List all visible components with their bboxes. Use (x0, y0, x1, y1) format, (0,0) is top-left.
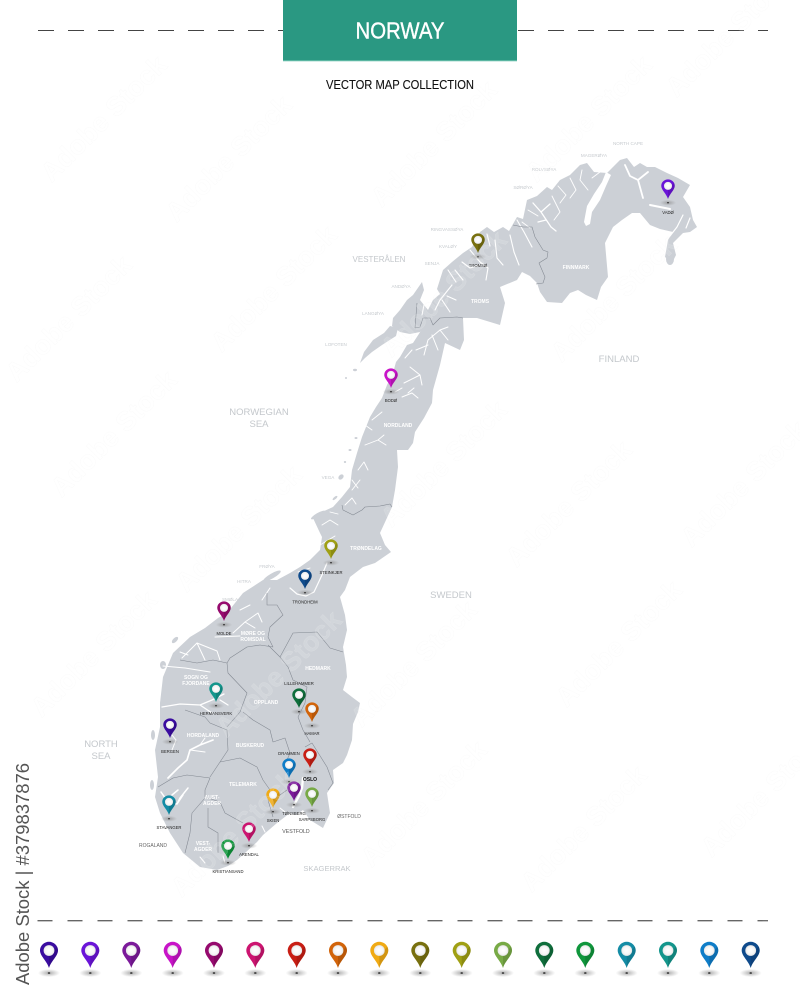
pin: Skien (265, 788, 281, 823)
pin: Steinkjer (319, 539, 343, 575)
pin: Tønsberg: TØNSBERG (282, 811, 306, 816)
pin: Bodø: BODØ (385, 398, 398, 403)
surrounding labels: HITRA (237, 579, 252, 584)
stock watermarks: Adobe Stock (375, 224, 513, 363)
surrounding labels: KVALØY (439, 244, 457, 249)
surrounding labels: SEA (249, 419, 269, 430)
pin: Tromsø (469, 233, 488, 268)
surrounding labels: SØRØYA (513, 185, 534, 190)
fjords (161, 165, 690, 863)
surrounding labels: SMØLA (222, 597, 239, 602)
surrounding labels: SENJA (425, 261, 440, 266)
pin: Bergen: BERGEN (161, 749, 179, 754)
subtitle: VECTOR MAP COLLECTION (326, 78, 474, 92)
surrounding labels: LANGØYA (362, 311, 385, 316)
surrounding labels: NORTH (84, 739, 118, 750)
pin: Bodø (383, 368, 399, 403)
county labels: BUSKERUD (236, 743, 265, 749)
county labels: FJORDANE (182, 681, 210, 687)
pin: Lillehammer (284, 681, 314, 715)
county labels: HORDALAND (187, 733, 219, 739)
county labels: TROMS (471, 299, 490, 305)
county labels: AUST- (204, 795, 220, 801)
county labels: AGDER (203, 801, 221, 807)
stock watermarks: Adobe Stock (500, 434, 638, 573)
county labels: HEDMARK (305, 666, 331, 672)
stock watermarks: Adobe Stock (35, 49, 173, 188)
surrounding labels: ROLVSØYA (532, 167, 557, 172)
county labels: SOGN OG (184, 675, 208, 681)
pin: Steinkjer: STEINKJER (319, 570, 343, 575)
pin: Vardø (660, 179, 676, 215)
surrounding labels: SWEDEN (430, 590, 472, 601)
pin: Sarpsborg (299, 787, 325, 822)
pin: Kristiansand (213, 839, 243, 874)
pin: Arendal: ARENDAL (239, 852, 260, 857)
stock watermarks: Adobe Stock (345, 594, 483, 733)
pin: Bergen (161, 718, 179, 754)
stock watermarks: Adobe Stock (550, 574, 688, 713)
county labels: MØRE OG (241, 631, 265, 637)
stock watermarks: Adobe Stock (25, 584, 163, 723)
surrounding labels (84, 141, 643, 873)
stock watermarks: Adobe Stock (375, 394, 513, 533)
surrounding labels: ØSTFOLD (337, 814, 361, 820)
bottom dashed rule (38, 920, 768, 922)
stock watermarks: Adobe Stock (45, 364, 183, 503)
surrounding labels: NORWEGIAN (229, 407, 289, 418)
pin: Lillehammer: LILLEHAMMER (284, 681, 314, 686)
small coastal islands (150, 253, 674, 790)
county labels: OPPLAND (254, 700, 279, 706)
surrounding labels: RINGVASSØYA (431, 227, 464, 232)
pin: Hamar (304, 702, 320, 736)
pin: Arendal (239, 822, 260, 857)
pin: Molde: MOLDE (217, 631, 232, 636)
mainland shape (155, 158, 697, 870)
stock watermarks: Adobe Stock (160, 89, 298, 228)
pin colour legend row (38, 942, 762, 977)
county labels: VEST- (196, 841, 211, 847)
title: NORWAY (356, 18, 444, 44)
pin: Vardø: VADØ (662, 210, 675, 215)
pin: Stavanger (157, 795, 181, 830)
Lofoten islands (360, 326, 398, 363)
surrounding labels: VESTERÅLEN (353, 255, 406, 264)
stock watermarks: Adobe Stock (0, 249, 138, 388)
pin: Oslo: OSLO (303, 777, 317, 783)
pin: Sarpsborg: SARPSBORG (299, 817, 325, 822)
county labels: AGDER (194, 847, 212, 853)
county labels: TELEMARK (229, 782, 257, 788)
pin: Trondheim: TRONDHEIM (292, 600, 318, 604)
pin: Hermansverk: HERMANSVERK (200, 711, 232, 716)
stock watermarks: Adobe Stock (210, 604, 348, 743)
pin: Drammen: DRAMMEN (278, 751, 300, 756)
surrounding labels: FRØYA (259, 564, 276, 569)
pin: Molde (216, 601, 232, 636)
pin: Oslo (302, 748, 318, 783)
county labels: ROMSDAL (240, 637, 266, 643)
surrounding labels: FINLAND (599, 354, 639, 365)
pin: Hermansverk (200, 682, 232, 716)
county borders (158, 225, 548, 853)
pin: Skien: SKIEN (267, 818, 279, 823)
top dashed rule (38, 30, 768, 32)
pin: Kristiansand: KRISTIANSAND (213, 869, 243, 874)
city pins (157, 179, 676, 874)
stock watermarks: Adobe Stock (205, 219, 343, 358)
stock watermarks: Adobe Stock (515, 759, 653, 898)
surrounding labels: SEA (91, 751, 111, 762)
county labels: FINNMARK (563, 265, 590, 271)
pin: Stavanger: STAVANGER (157, 825, 181, 830)
surrounding labels: SKAGERRAK (303, 864, 351, 873)
stock watermarks: Adobe Stock (170, 459, 308, 598)
pin: Trondheim (292, 569, 318, 604)
stock watermarks: Adobe Stock (355, 734, 493, 873)
surrounding labels: VEGA (322, 475, 335, 480)
Porsangerfjord (584, 172, 611, 226)
surrounding labels: LOFOTEN (325, 342, 347, 347)
stock watermarks: Adobe Stock (165, 764, 303, 903)
surrounding labels: NORTH CAPE (613, 141, 643, 146)
county labels (182, 265, 590, 853)
stock watermarks: Adobe Stock (520, 49, 658, 188)
surrounding labels: MAGERØYA (581, 153, 608, 158)
stock credit: Adobe Stock | #379837876 (13, 763, 33, 985)
pin: Drammen (278, 751, 300, 785)
pin: Hamar: HAMAR (304, 731, 320, 736)
pin: Tromsø: TROMSØ (469, 263, 488, 268)
county labels: NORDLAND (384, 423, 413, 429)
surrounding labels: ROGALAND (139, 843, 167, 849)
surrounding labels: ANDØYA (391, 284, 411, 289)
stock watermarks: Adobe Stock (365, 74, 503, 213)
title banner (283, 0, 517, 61)
county labels: TRØNDELAG (350, 546, 382, 552)
surrounding labels: VESTFOLD (282, 829, 310, 835)
map of Norway (150, 158, 697, 870)
Vesteralen islands (392, 282, 430, 334)
pin: Tønsberg (282, 781, 306, 816)
stock watermarks: Adobe Stock (545, 229, 683, 368)
